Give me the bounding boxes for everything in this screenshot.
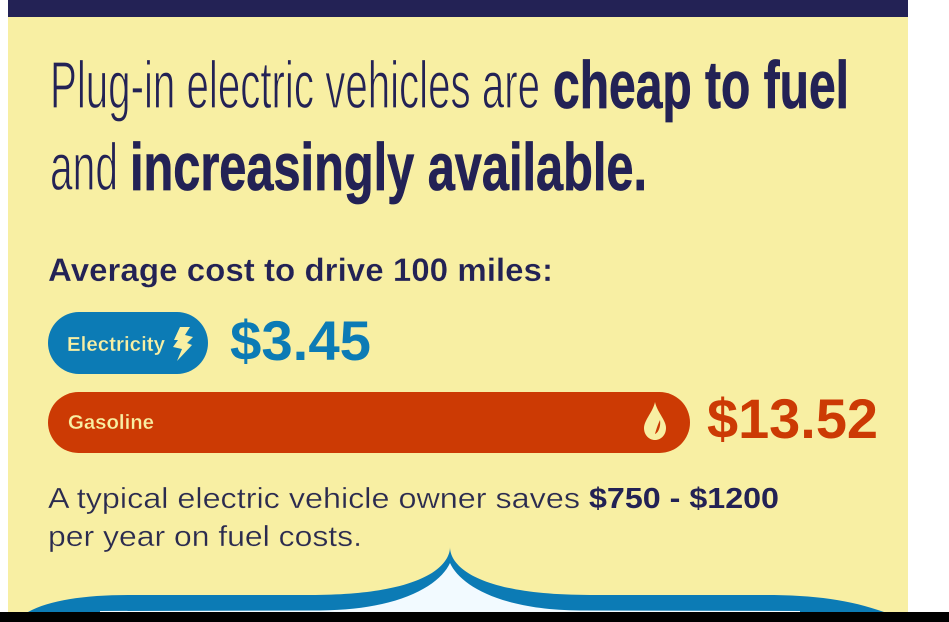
savings text: $750 - $1200 (589, 483, 779, 515)
title (50, 48, 849, 205)
title: Plug-in electric vehicles are (50, 48, 540, 123)
gasoline bar (48, 392, 690, 453)
curly brace callout (28, 547, 884, 612)
bottom black band (0, 612, 949, 622)
title: increasingly available. (130, 130, 647, 205)
title: and (50, 130, 118, 205)
savings text: A typical electric vehicle owner saves (48, 483, 580, 515)
savings text (48, 483, 779, 553)
electricity bar: Electricity (67, 334, 166, 356)
subheading: Average cost to drive 100 miles: (48, 252, 553, 288)
electricity bar (48, 312, 208, 374)
gasoline bar: Gasoline (68, 412, 154, 434)
gasoline cost: $13.52 (707, 387, 878, 450)
icon: fuel drop (644, 402, 666, 440)
electricity cost: $3.45 (230, 309, 371, 372)
icon: lightning bolt (173, 327, 193, 361)
savings text: per year on fuel costs. (48, 521, 362, 553)
top navy bar (8, 0, 908, 17)
